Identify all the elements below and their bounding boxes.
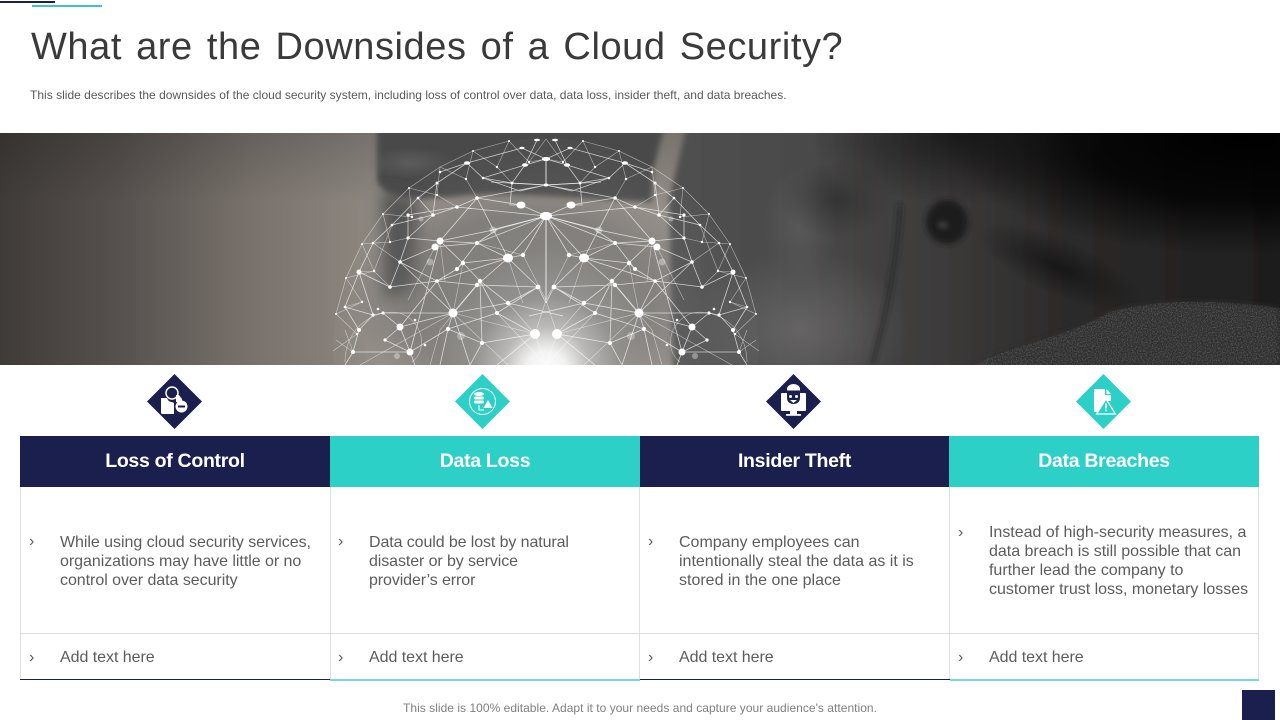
- bullet marker column 2: ›: [338, 533, 343, 550]
- title: What are the Downsides of a Cloud Security?: [31, 26, 843, 68]
- footer note: This slide is 100% editable. Adapt it to your needs and capture your audience's attention.: [403, 701, 877, 715]
- coat body: [669, 120, 1280, 375]
- text: column 2 body: Data could be lost by natural: [369, 534, 569, 551]
- globe: [333, 138, 760, 365]
- text: column 3 body: [679, 534, 914, 589]
- smear on shoulder: [384, 154, 436, 172]
- mid-tone behind globe: [375, 197, 671, 365]
- row: add text column 4: Add text here: [989, 649, 1084, 666]
- coat button: [926, 200, 968, 244]
- row: add text column 3: Add text here: [679, 649, 774, 666]
- text: column 1 body: [60, 534, 311, 589]
- bullet marker column 3: ›: [648, 533, 653, 550]
- text: column 2 body: provider’s error: [369, 572, 475, 589]
- text: column 2 body: disaster or by service: [369, 553, 518, 570]
- heading: Insider Theft: [640, 436, 949, 487]
- row: add text column 1: ›: [29, 649, 34, 666]
- heading: Data Breaches: Data Breaches: [1038, 450, 1170, 472]
- text: column 4 body: [989, 524, 1248, 598]
- row: add text column 2: ›: [338, 649, 343, 666]
- row: add text column 2: Add text here: [369, 649, 464, 666]
- header accent lines: [0, 1, 102, 7]
- text: column 4 body: data breach is still possible that can: [989, 543, 1241, 560]
- heading: Loss of Control: [20, 436, 330, 487]
- text: column 1 body: control over data security: [60, 572, 238, 589]
- icon: data loss: [455, 374, 510, 429]
- dark band on left of globe: [382, 190, 420, 300]
- text: column 4 body: customer trust loss, monetary losses: [989, 581, 1248, 598]
- text: column 1 body: organizations may have little or no: [60, 553, 301, 570]
- text: column 3 body: Company employees can: [679, 534, 860, 551]
- heading: Insider Theft: Insider Theft: [738, 450, 851, 472]
- coat shading: [992, 133, 1280, 238]
- hero photo: glowing network globe: [0, 133, 1280, 365]
- row: add text column 4: ›: [958, 649, 963, 666]
- bullet marker column 4: ›: [958, 524, 963, 541]
- heading: Data Breaches: [949, 436, 1259, 487]
- icon: loss of control: [147, 374, 202, 429]
- background wall: [0, 133, 689, 365]
- text: column 1 body: While using cloud security services,: [60, 534, 311, 551]
- row: add text column 1: Add text here: [60, 649, 155, 666]
- icon: insider theft: [766, 374, 821, 429]
- text: column 4 body: Instead of high-security measures, a: [989, 524, 1246, 541]
- knit sleeve: [1094, 303, 1280, 365]
- bullet marker column 1: ›: [29, 533, 34, 550]
- page number box: [1242, 690, 1275, 720]
- text: column 3 body: stored in the one place: [679, 572, 841, 589]
- row: add text column 3: ›: [648, 649, 653, 666]
- coat seam: [872, 205, 900, 365]
- heading: Loss of Control: Loss of Control: [105, 450, 245, 472]
- subtitle: This slide describes the downsides of the cloud security system, including loss of control over data, data loss, insider theft, and data breaches.: [30, 88, 787, 102]
- text: column 4 body: further lead the company to: [989, 562, 1183, 579]
- text: column 2 body: [369, 534, 569, 589]
- dark shoulder silhouette: [374, 133, 666, 205]
- heading: Data Loss: Data Loss: [440, 450, 530, 472]
- text: column 3 body: intentionally steal the data as it is: [679, 553, 914, 570]
- table grid: [20, 487, 1259, 681]
- heading: Data Loss: [330, 436, 640, 487]
- icon: data breaches: [1076, 374, 1131, 429]
